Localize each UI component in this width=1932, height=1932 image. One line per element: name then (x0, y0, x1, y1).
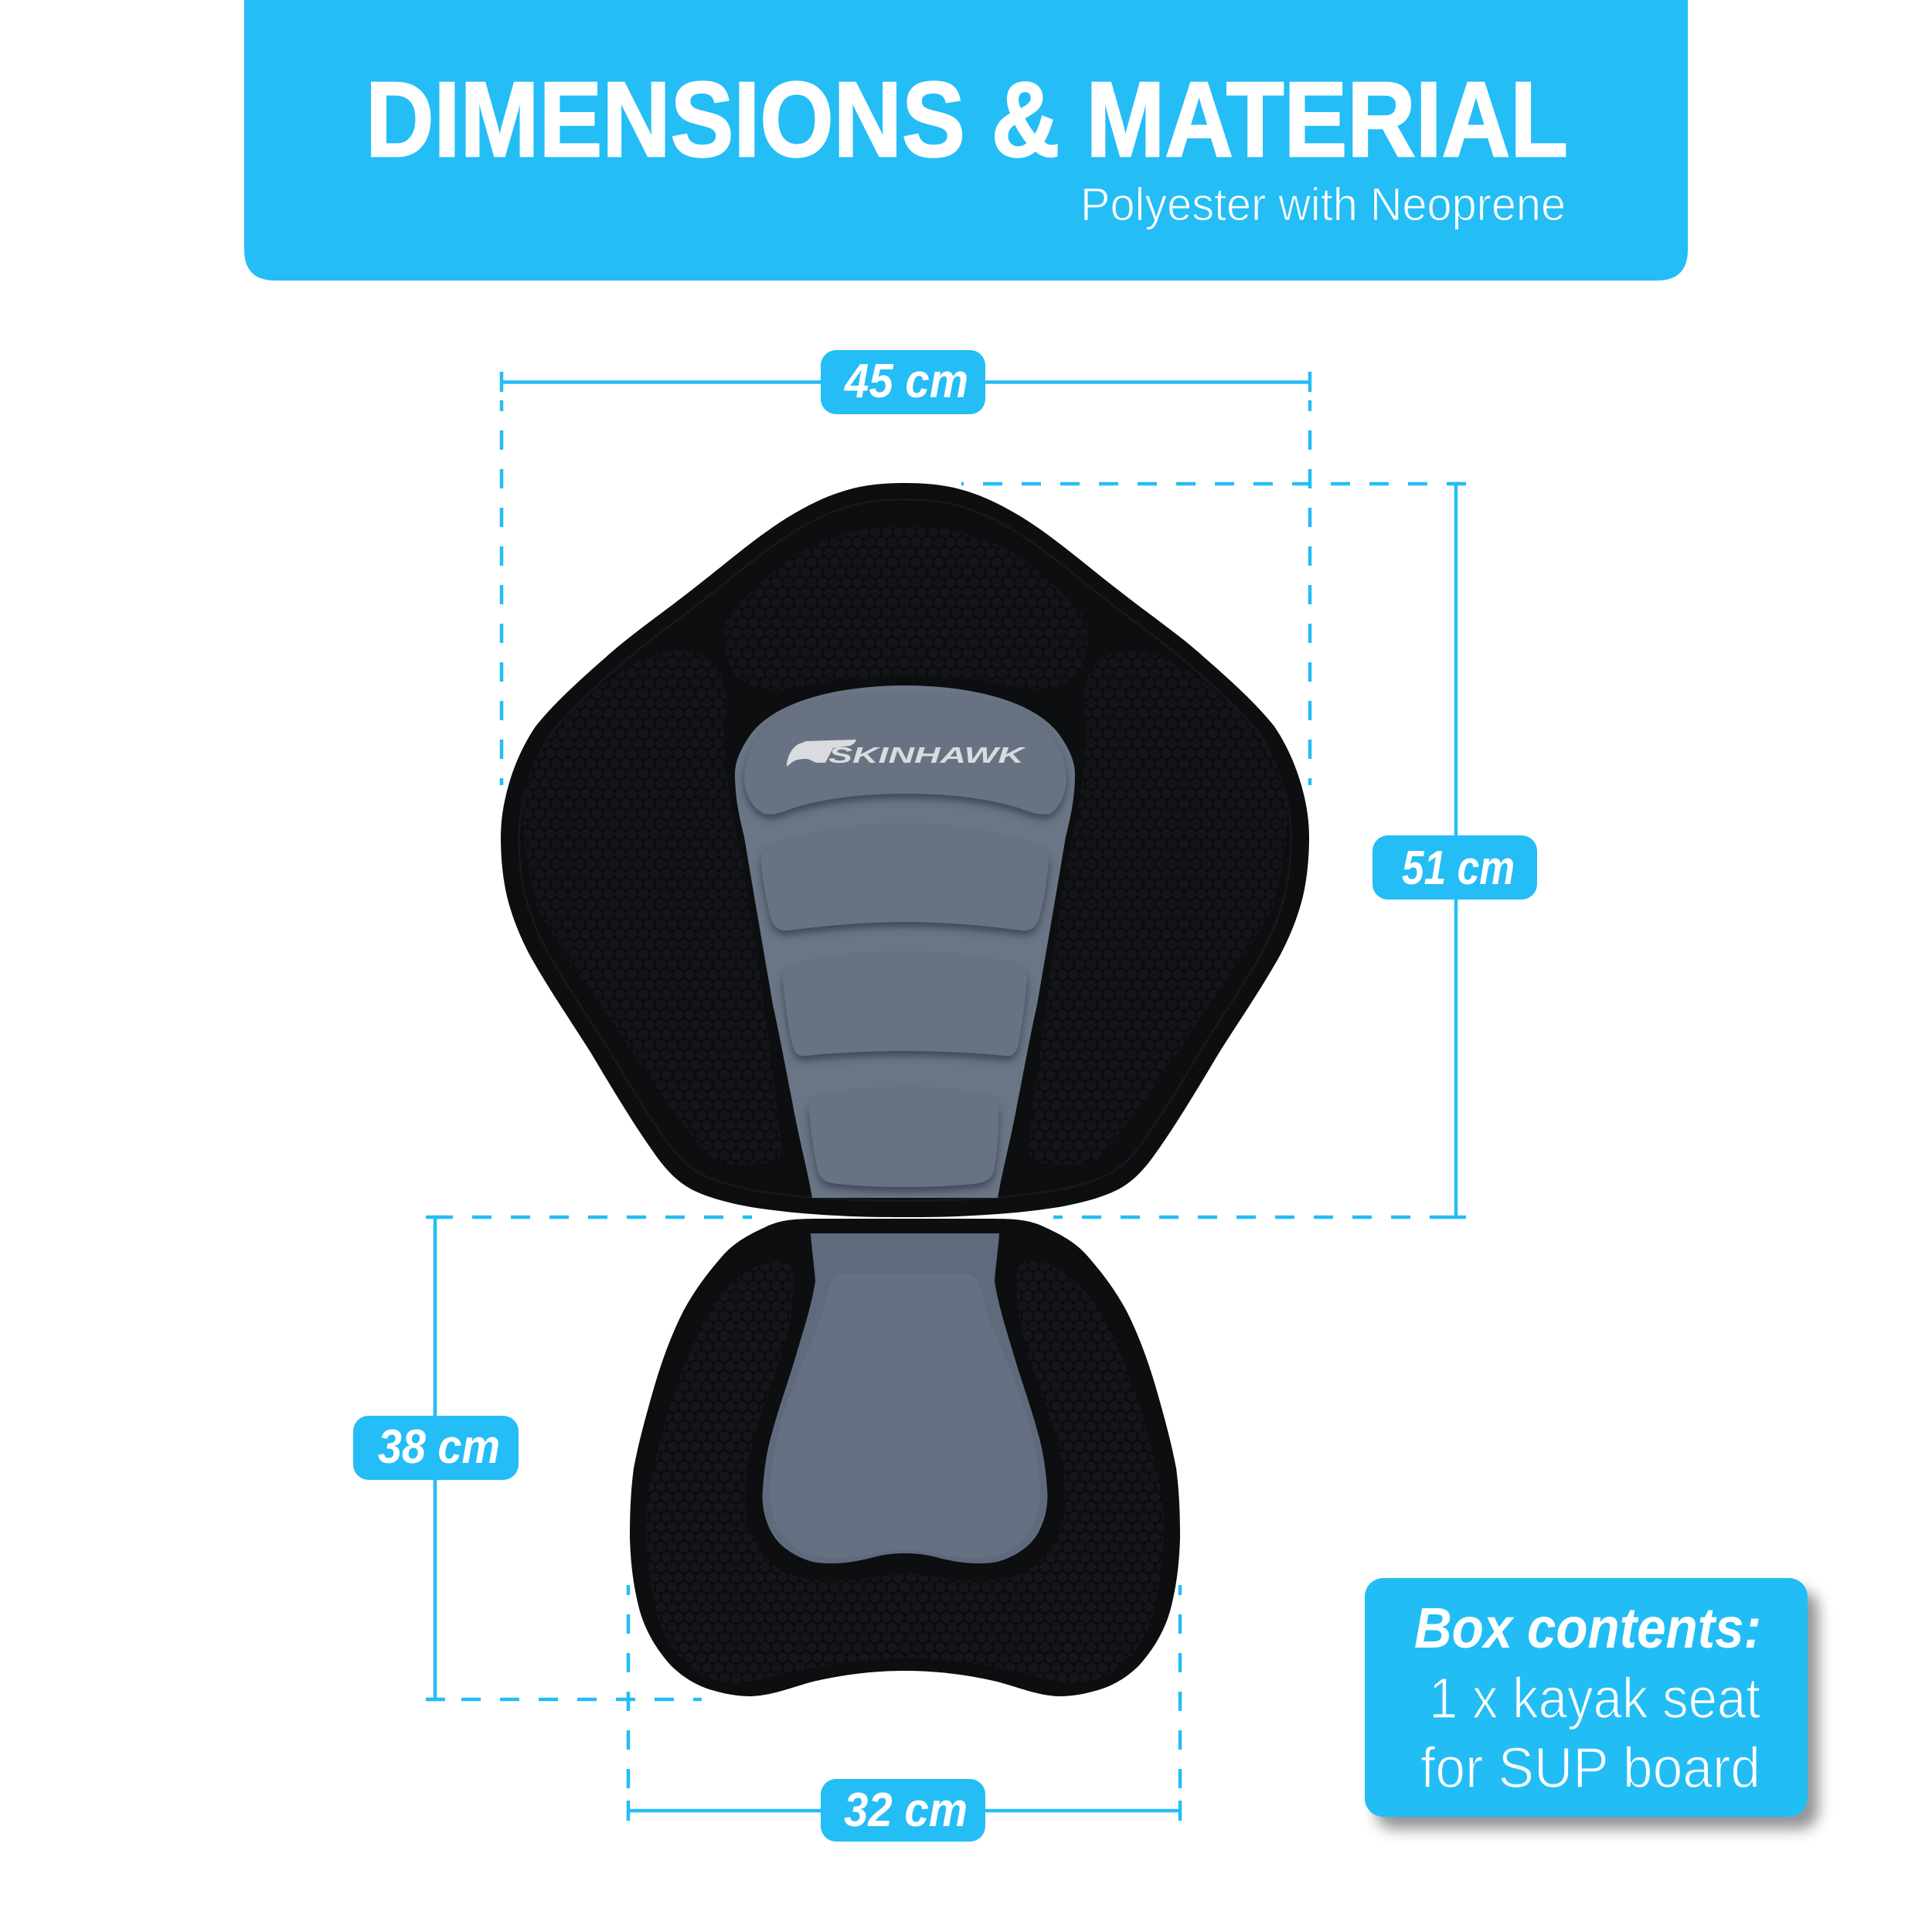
title: DIMENSIONS & MATERIAL (366, 60, 1568, 179)
dimension: length 38 cm (353, 1217, 752, 1699)
seat base mesh panel (646, 1262, 1164, 1682)
lumbar pads (744, 693, 1066, 1187)
seat back cushion (501, 483, 1309, 1217)
seat base cushion (630, 1219, 1180, 1696)
label 45 cm (821, 350, 985, 414)
seat base grey strip (763, 1233, 1047, 1563)
grey centre strip (735, 685, 1075, 1198)
label 45 cm: 45 cm (843, 355, 968, 408)
dimension: width 45 cm (502, 350, 1310, 785)
label 32 cm: 32 cm (844, 1784, 968, 1837)
label 51 cm (1372, 835, 1537, 900)
callout line 2: for SUP board (1420, 1736, 1760, 1800)
seat base pad (770, 1274, 1039, 1558)
dimension: width 32 cm (628, 1585, 1180, 1842)
callout heading: Box contents: (1414, 1596, 1761, 1660)
label 38 cm (353, 1416, 519, 1480)
callout line 1: 1 x kayak seat (1429, 1666, 1760, 1730)
dimension: height 51 cm (961, 484, 1537, 1217)
headrest mesh panel (724, 526, 1088, 690)
left mesh panel (523, 651, 781, 1165)
subtitle: Polyester with Neoprene (1080, 179, 1566, 230)
label 51 cm: 51 cm (1402, 842, 1515, 895)
brand logo (787, 740, 1026, 768)
box contents callout (1365, 1578, 1808, 1817)
brand logo: SKINHAWK (828, 743, 1026, 768)
header banner (244, 0, 1688, 281)
label 38 cm: 38 cm (378, 1420, 500, 1474)
right mesh panel (1029, 651, 1287, 1165)
